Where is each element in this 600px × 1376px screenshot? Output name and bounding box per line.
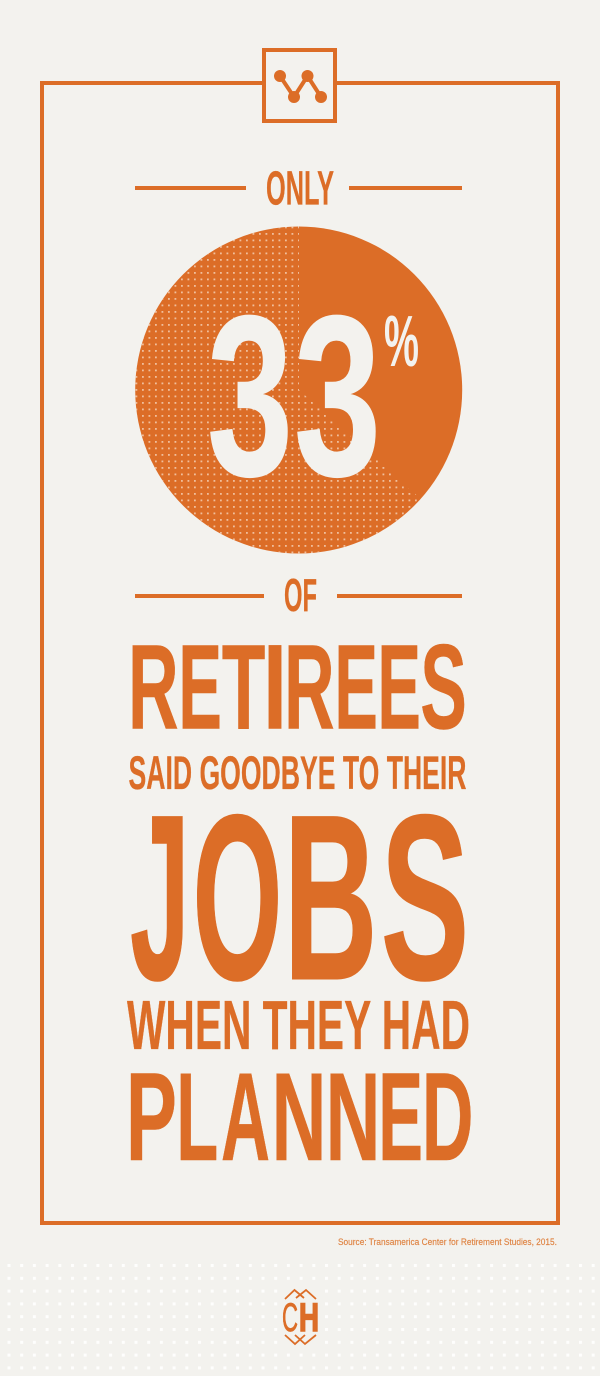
chart: 33 percent circle: [130, 220, 470, 560]
heading: of: OF: [284, 569, 317, 621]
logo: CH: [280, 1286, 320, 1348]
text: retirees: R: [284, 618, 335, 754]
text: retirees: I: [263, 618, 287, 754]
chart: 33 percent circle: %: [384, 302, 419, 382]
text: retirees: E: [377, 618, 421, 754]
logo: CH: C: [282, 1296, 298, 1340]
text: retirees: E: [334, 618, 378, 754]
text: jobs: B: [284, 766, 378, 1030]
text: retirees: T: [222, 618, 265, 754]
text: jobs: S: [381, 766, 469, 1030]
text: retirees: E: [178, 618, 222, 754]
source note: Source: Transamerica Center for Retirement Studies, 2015.: [338, 1237, 557, 1247]
heading: only: ONLY: [266, 162, 334, 216]
text: jobs: O: [192, 766, 282, 1030]
text: planned: E: [378, 1048, 423, 1187]
text: retirees: R: [128, 618, 179, 754]
text: retirees: S: [420, 618, 467, 754]
icon: logo box with connected nodes: [264, 50, 335, 121]
text: jobs: [130, 766, 469, 1030]
text: planned: L: [176, 1048, 218, 1187]
text: jobs: J: [130, 766, 190, 1030]
chart: 33 percent circle: 3: [294, 268, 381, 524]
text: planned: D: [422, 1048, 474, 1187]
footer dot pattern: [0, 1262, 600, 1376]
logo: CH: H: [299, 1296, 319, 1340]
text: planned: [126, 1048, 474, 1187]
chart: 33 percent circle: 3: [207, 268, 293, 524]
text: planned: A: [221, 1048, 270, 1187]
text: planned: P: [126, 1048, 177, 1187]
heading: of: [135, 569, 462, 621]
text: retirees: [128, 618, 467, 754]
outer frame: [42, 83, 558, 1223]
text: planned: N: [326, 1048, 380, 1187]
text: planned: N: [272, 1048, 326, 1187]
heading: only: [135, 162, 462, 216]
